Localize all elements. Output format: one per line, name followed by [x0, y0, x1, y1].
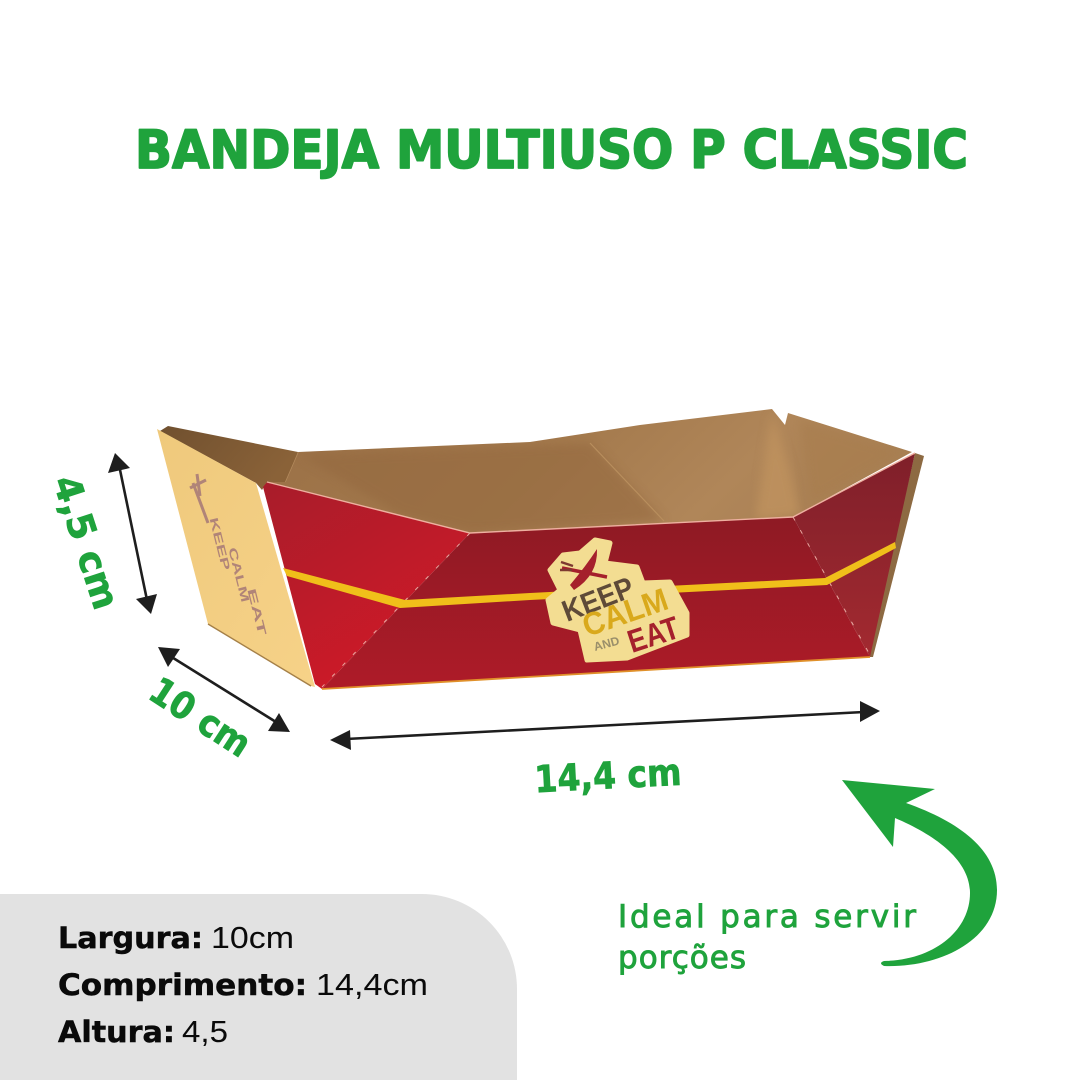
knife and fork — [560, 549, 607, 590]
product photo: tray — [157, 409, 924, 689]
panel: specifications — [0, 894, 517, 1080]
bottom orange edge — [322, 657, 870, 689]
sticker: keep calm and eat: EAT — [623, 609, 684, 660]
flap lower edge — [208, 624, 311, 686]
flap mirrored print: EAT — [244, 587, 269, 638]
fold lines — [322, 517, 870, 687]
spec: altura: Altura: — [58, 1015, 175, 1049]
spec: comprimento — [58, 967, 428, 1002]
right outer flap — [868, 453, 924, 657]
spec: largura — [58, 920, 294, 955]
left cream flap — [157, 429, 315, 687]
dimension arrow: height — [108, 453, 157, 614]
tray interior: left dark kraft — [160, 426, 298, 490]
tray interior: back kraft — [267, 409, 912, 533]
title: BANDEJA MULTIUSO P CLASSIC — [135, 120, 968, 181]
red center panel — [322, 517, 870, 689]
dimension label: 14,4 cm: 14,4 cm — [533, 751, 682, 801]
spec: comprimento: 14,4cm — [316, 967, 428, 1002]
rim highlight — [267, 453, 915, 533]
sticker: keep calm and eat: CALM — [578, 581, 672, 644]
flap mirrored print: CALM — [225, 546, 251, 604]
spec: altura: 4,5 — [182, 1014, 228, 1049]
spec: altura — [58, 1014, 228, 1049]
dimension label: 10 cm: 10 cm — [141, 669, 259, 766]
dimension label: 4,5 cm: 4,5 cm — [44, 470, 128, 615]
spec: largura: 10cm — [211, 920, 294, 955]
dimension arrow: width — [158, 647, 290, 732]
spec: comprimento: Comprimento: — [58, 968, 307, 1002]
spec: largura: Largura: — [58, 921, 203, 955]
handwritten note: porções — [618, 940, 746, 976]
yellow stripe — [283, 542, 896, 608]
red left panel — [263, 482, 470, 689]
sticker: keep calm and eat: KEEP — [558, 571, 639, 629]
flap mirrored print: KEEP — [207, 516, 232, 572]
handwritten note — [618, 899, 916, 976]
dimension arrow: length — [330, 701, 880, 750]
red right panel — [793, 453, 915, 657]
curved green arrow — [842, 780, 997, 966]
handwritten note: Ideal para servir — [618, 899, 916, 935]
sticker: keep calm and eat — [548, 540, 687, 660]
tray interior: fold shading — [285, 412, 905, 533]
flap mirrored print — [190, 474, 269, 638]
sticker: keep calm and eat: AND — [592, 634, 621, 654]
